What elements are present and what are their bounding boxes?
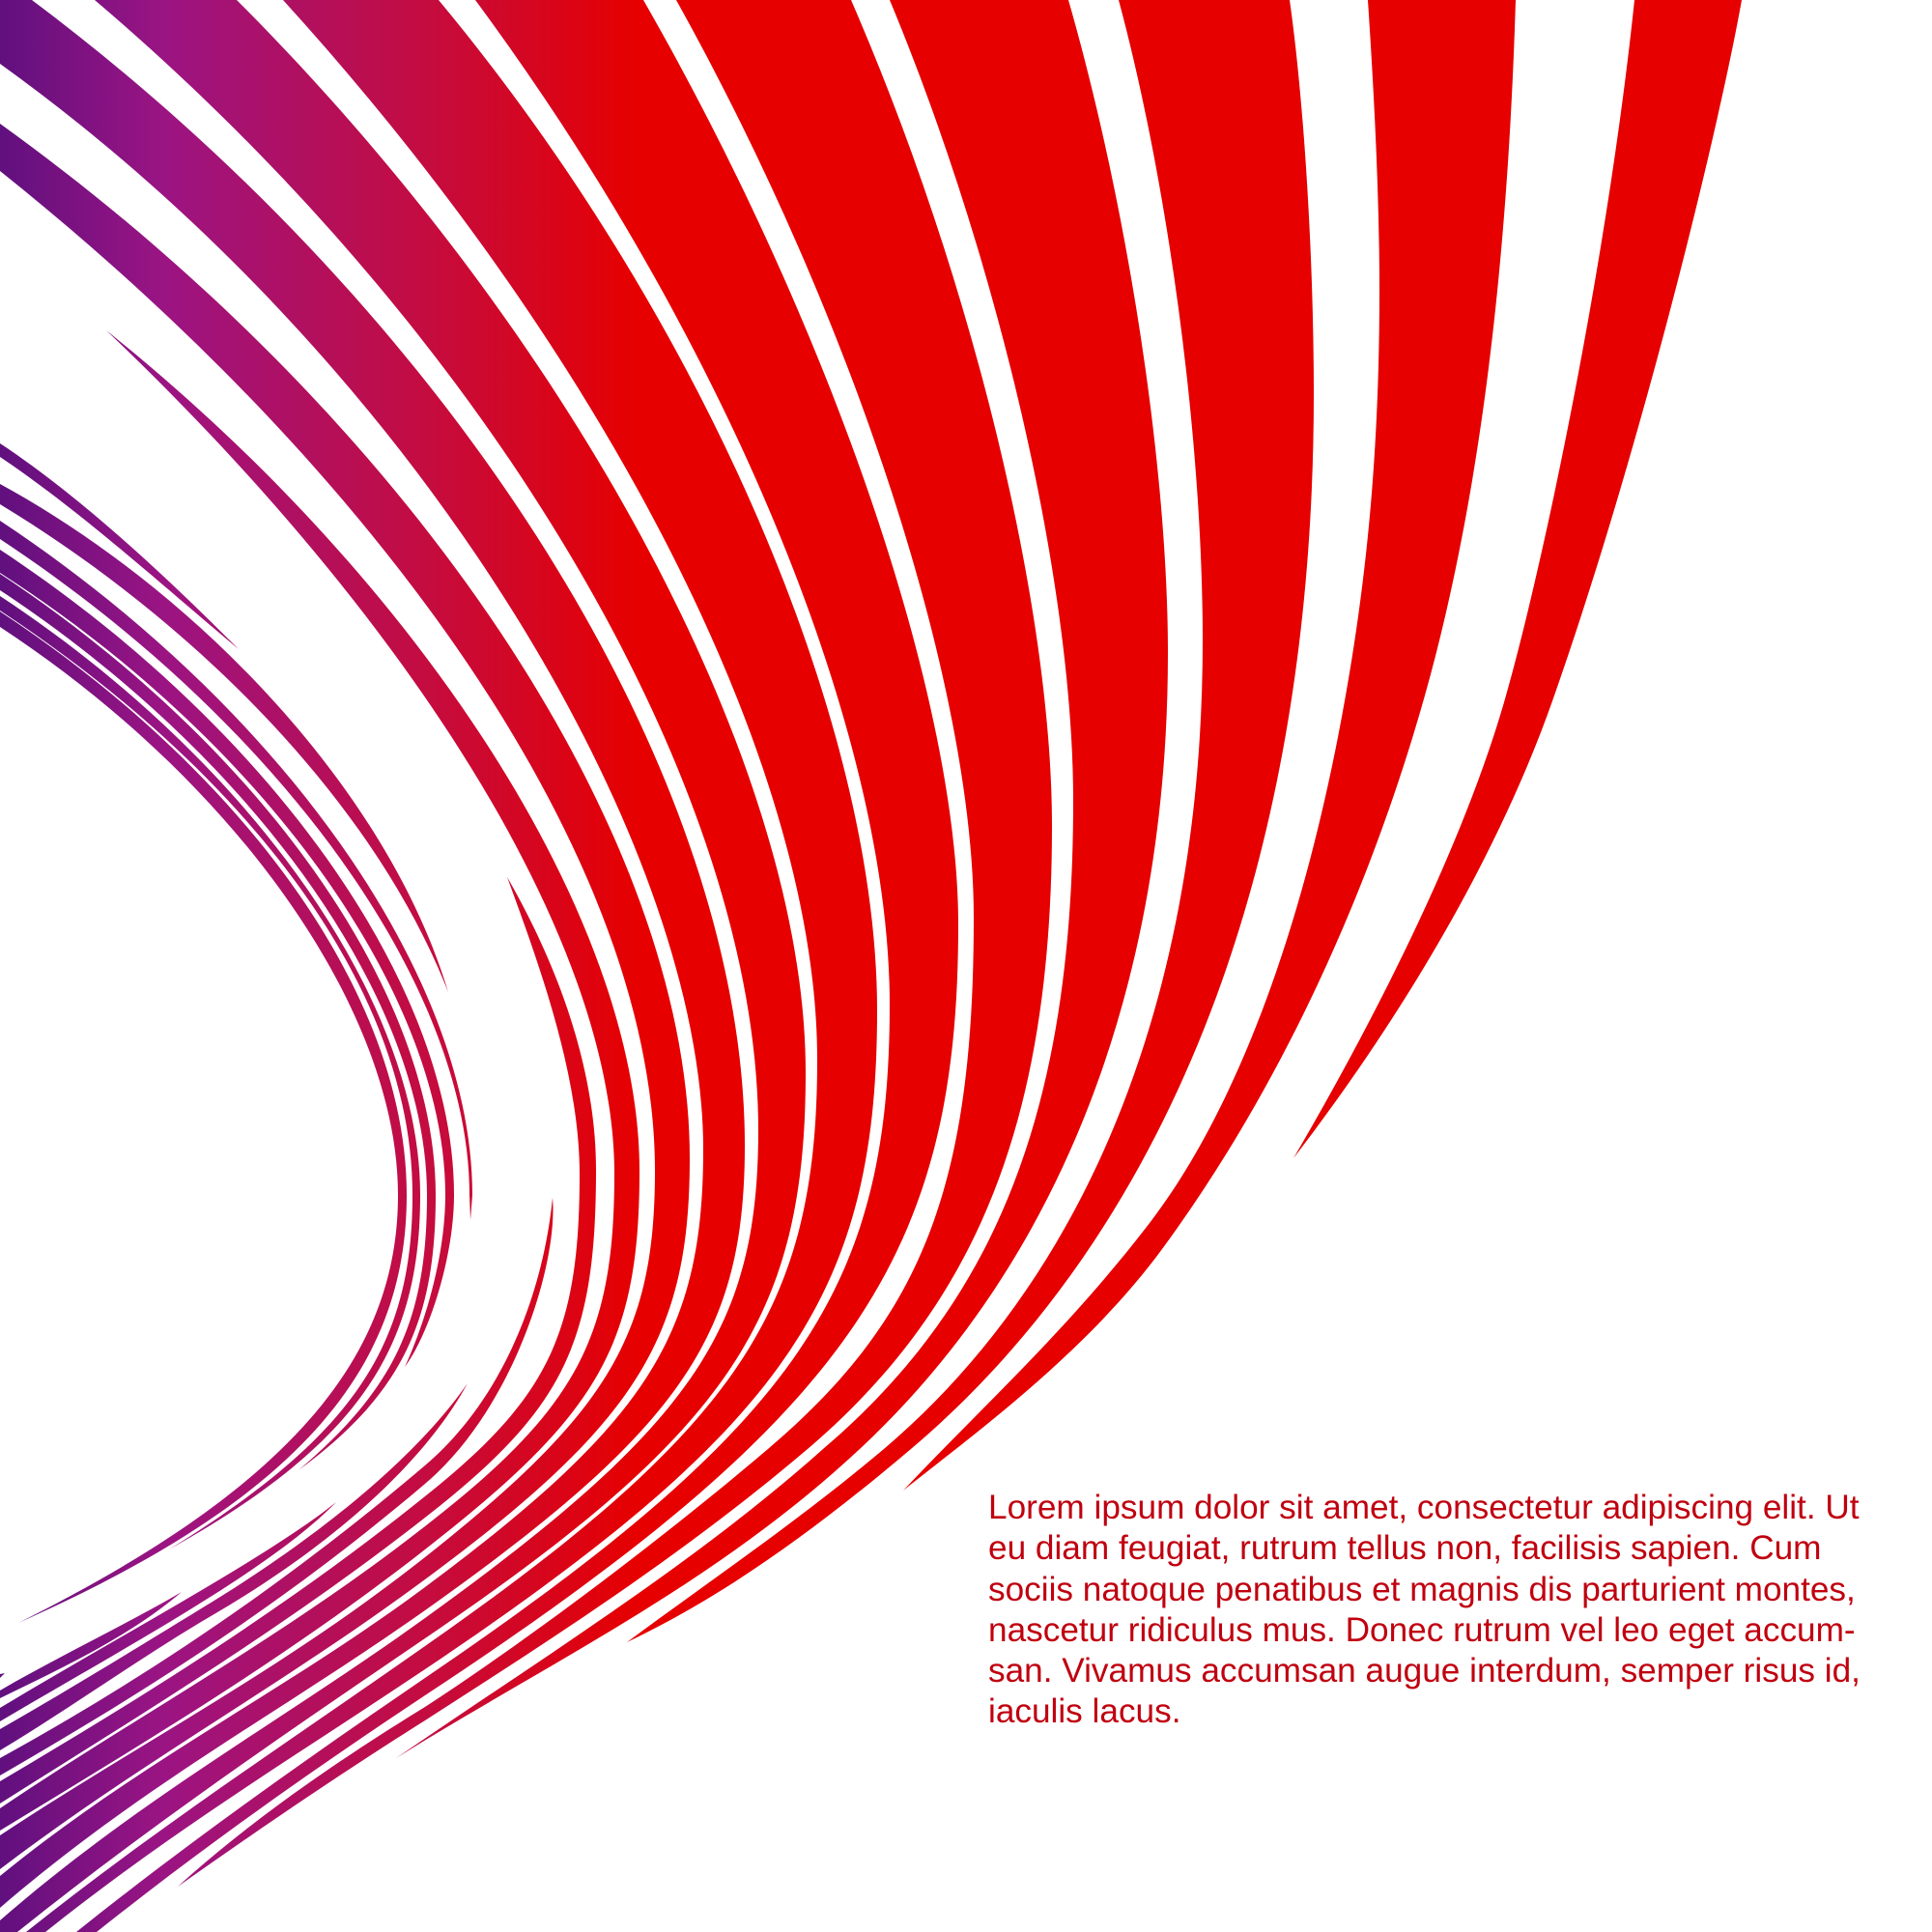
strand c: curved strand <box>0 521 472 1220</box>
ribbon 8: crimson band <box>0 0 806 1932</box>
text block: lorem ipsum paragraph: nascetur ridiculus mus. Donec rutrum vel leo eget accum- <box>988 1611 1856 1649</box>
text block: lorem ipsum paragraph: iaculis lacus. <box>988 1692 1180 1730</box>
ribbon 9: purple band from top-left corner <box>0 0 745 1908</box>
text block: lorem ipsum paragraph <box>988 1489 1861 1730</box>
ribbon 1: rightmost red band <box>1293 0 1742 1158</box>
text block: lorem ipsum paragraph: eu diam feugiat, rutrum tellus non, facilisis sapien. Cum <box>988 1529 1822 1567</box>
strand f: curved strand <box>0 596 420 1549</box>
ribbon 12: band with tip at centre <box>0 877 596 1804</box>
ribbon 17: tiny sliver at left edge <box>0 1673 5 1678</box>
text block: lorem ipsum paragraph: san. Vivamus accumsan augue interdum, semper risus id, <box>988 1652 1861 1690</box>
ribbon 15: lower sliver <box>0 1502 336 1721</box>
ribbon 16: lower sliver <box>0 1592 182 1698</box>
ribbon 6: red to purple band <box>76 0 958 1932</box>
ribbon 13: lower band with tip near centre <box>0 1198 554 1776</box>
strand d: curved strand <box>0 550 454 1367</box>
strand e: curved strand <box>0 574 436 1470</box>
text block: lorem ipsum paragraph: Lorem ipsum dolor sit amet, consectetur adipiscing elit. Ut <box>988 1489 1860 1526</box>
strand g: innermost curved strand <box>0 611 407 1623</box>
ribbon 7: crimson band <box>26 0 877 1932</box>
ribbon 5: red band <box>178 0 1052 1887</box>
text block: lorem ipsum paragraph: sociis natoque penatibus et magnis dis parturient montes, <box>988 1571 1856 1608</box>
strand a: upper short sliver <box>0 443 239 649</box>
ribbon 4: red band <box>396 0 1168 1758</box>
ribbon 2: red band <box>903 0 1516 1491</box>
ribbon 11: band with tip at upper left <box>0 330 639 1831</box>
ribbon 14: lower sliver <box>0 1383 468 1750</box>
ribbon 10: purple band from left edge <box>0 124 690 1869</box>
ribbon 3: red band <box>627 0 1314 1642</box>
strand b: sliver ending near apex <box>0 484 448 992</box>
